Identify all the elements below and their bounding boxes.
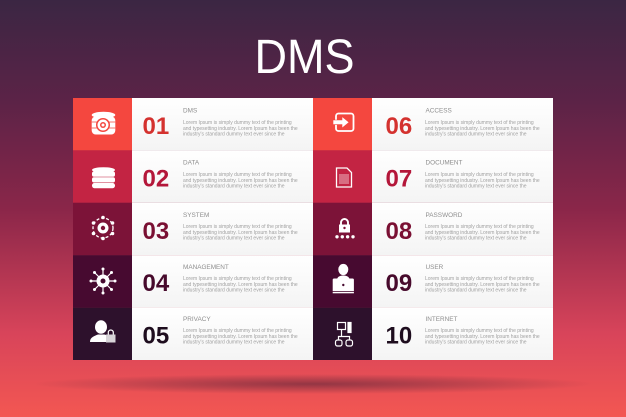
panel: left column (73, 98, 313, 360)
item 07 DOCUMENT: industry's standard dummy text ever since the (425, 184, 527, 190)
item 09 USER: Lorem Ipsum is simply dummy text of the printing (425, 276, 534, 282)
item 07 DOCUMENT: Lorem Ipsum is simply dummy text of the printing (425, 172, 534, 178)
item 03 SYSTEM (73, 203, 313, 255)
item 01 DMS: industry's standard dummy text ever since the (183, 132, 285, 138)
item 01 DMS: and typesetting industry. Lorem Ipsum has been the (183, 126, 298, 132)
item 07 DOCUMENT (313, 150, 553, 203)
item 04 MANAGEMENT (73, 255, 313, 308)
icon: system network (92, 216, 114, 240)
item 09 USER: USER (426, 264, 444, 271)
item 07 DOCUMENT: and typesetting industry. Lorem Ipsum has been the (425, 178, 540, 184)
icon: network flow (336, 322, 352, 346)
icon: user with lock (90, 320, 116, 342)
item 01 DMS: Lorem Ipsum is simply dummy text of the printing (183, 120, 292, 126)
item 10 INTERNET: and typesetting industry. Lorem Ipsum has been the (425, 334, 540, 340)
item 10 INTERNET: Lorem Ipsum is simply dummy text of the printing (425, 328, 534, 334)
item 04 MANAGEMENT: industry's standard dummy text ever since the (183, 288, 285, 294)
item 03 SYSTEM: industry's standard dummy text ever since the (183, 236, 285, 242)
item 04 MANAGEMENT: and typesetting industry. Lorem Ipsum has been the (183, 282, 298, 288)
item 02 DATA: DATA (183, 160, 200, 166)
item 02 DATA: 02 (142, 165, 169, 192)
item 07 DOCUMENT: DOCUMENT (426, 160, 463, 166)
icon: management hub (90, 268, 116, 294)
item 04 MANAGEMENT: 04 (142, 270, 170, 297)
item 09 USER (313, 255, 553, 308)
item 08 PASSWORD (313, 203, 553, 255)
item 03 SYSTEM: 03 (142, 218, 169, 245)
item 09 USER: 09 (386, 270, 412, 297)
item 10 INTERNET: industry's standard dummy text ever since the (425, 340, 527, 346)
item 08 PASSWORD: 08 (386, 218, 412, 245)
item 07 DOCUMENT: 07 (386, 165, 412, 192)
item 04 MANAGEMENT: MANAGEMENT (183, 264, 229, 271)
item 06 ACCESS: 06 (386, 113, 412, 140)
item 08 PASSWORD: PASSWORD (426, 212, 463, 219)
item 09 USER: industry's standard dummy text ever since the (425, 288, 527, 294)
item 01 DMS: DMS (183, 108, 197, 114)
item 01 DMS (73, 98, 313, 150)
item 05 PRIVACY: 05 (142, 323, 169, 350)
title: DMS (254, 31, 354, 84)
item 02 DATA: Lorem Ipsum is simply dummy text of the printing (183, 172, 292, 178)
item 06 ACCESS (313, 98, 553, 150)
item 03 SYSTEM: and typesetting industry. Lorem Ipsum has been the (183, 230, 298, 236)
item 02 DATA (73, 150, 313, 203)
icon: access arrow (333, 114, 354, 131)
item 06 ACCESS: Lorem Ipsum is simply dummy text of the printing (425, 120, 534, 126)
item 06 ACCESS: and typesetting industry. Lorem Ipsum has been the (425, 126, 540, 132)
item 08 PASSWORD: industry's standard dummy text ever since the (425, 236, 527, 242)
item 08 PASSWORD: Lorem Ipsum is simply dummy text of the printing (425, 224, 534, 230)
item 10 INTERNET: INTERNET (426, 316, 458, 323)
item 03 SYSTEM: SYSTEM (183, 212, 209, 219)
ground shadow (33, 374, 593, 394)
item 09 USER: and typesetting industry. Lorem Ipsum has been the (425, 282, 540, 288)
item 06 ACCESS: industry's standard dummy text ever since the (425, 132, 527, 138)
icon: document (336, 168, 352, 187)
item 03 SYSTEM: Lorem Ipsum is simply dummy text of the printing (183, 224, 292, 230)
item 02 DATA: industry's standard dummy text ever since the (183, 184, 285, 190)
item 02 DATA: and typesetting industry. Lorem Ipsum has been the (183, 178, 298, 184)
item 05 PRIVACY: PRIVACY (183, 316, 211, 323)
item 05 PRIVACY: Lorem Ipsum is simply dummy text of the printing (183, 328, 292, 334)
icon: database (92, 167, 115, 188)
icon: user at laptop (333, 264, 354, 293)
item 01 DMS: 01 (142, 113, 169, 140)
icon: database gear (92, 112, 115, 134)
item 04 MANAGEMENT: Lorem Ipsum is simply dummy text of the printing (183, 276, 292, 282)
item 08 PASSWORD: and typesetting industry. Lorem Ipsum has been the (425, 230, 540, 236)
item 05 PRIVACY: industry's standard dummy text ever since the (183, 340, 285, 346)
item 10 INTERNET (313, 308, 553, 360)
panel: right column (313, 98, 553, 360)
item 05 PRIVACY (73, 308, 313, 360)
item 06 ACCESS: ACCESS (426, 108, 452, 114)
item 05 PRIVACY: and typesetting industry. Lorem Ipsum has been the (183, 334, 298, 340)
icon: password lock (335, 219, 355, 238)
item 10 INTERNET: 10 (386, 323, 412, 350)
